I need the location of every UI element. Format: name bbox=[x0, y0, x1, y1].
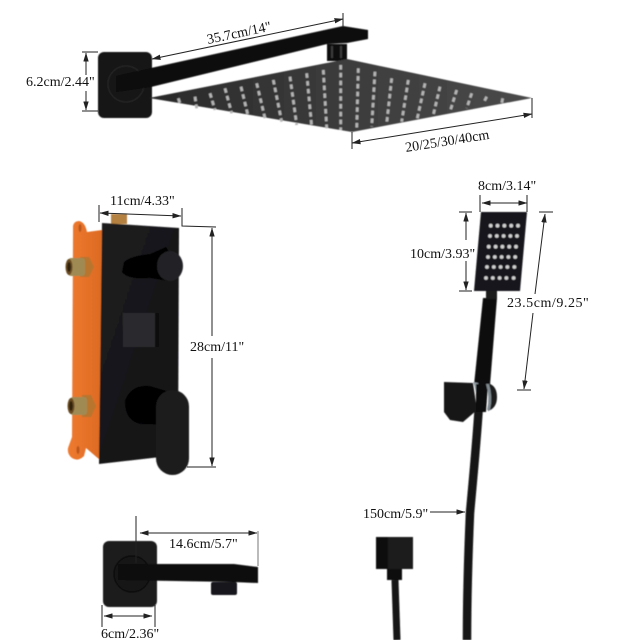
dimension: hand shower width: 8cm/3.14" bbox=[478, 179, 536, 194]
black faceplate bbox=[99, 223, 179, 464]
dimension: arm length bbox=[152, 13, 343, 59]
spout plate bbox=[103, 541, 157, 607]
dimension: valve width bbox=[99, 194, 216, 227]
dimension: hand shower length: 23.5cm/9.25" bbox=[507, 296, 589, 311]
spout ring bbox=[114, 556, 150, 592]
hand shower bbox=[444, 212, 527, 640]
dimension: valve width: 11cm/4.33" bbox=[110, 194, 175, 209]
bottom mounting ear hole bbox=[76, 446, 80, 454]
spray head bbox=[474, 212, 527, 291]
dimension: hose length bbox=[363, 507, 465, 522]
dimension: wall plate height bbox=[26, 52, 98, 111]
head nozzles bbox=[178, 65, 503, 130]
dimension: hand shower width bbox=[478, 179, 536, 212]
hose wall outlet bbox=[376, 537, 413, 640]
top mounting ear hole bbox=[78, 224, 82, 232]
brass top fitting bbox=[111, 214, 127, 224]
dimension: hand shower head height: 10cm/3.93" bbox=[410, 247, 475, 262]
square head bbox=[149, 59, 532, 132]
dimension: wall plate height: 6.2cm/2.44" bbox=[26, 75, 95, 90]
wall plate ring bbox=[108, 66, 144, 102]
upper knob bbox=[122, 247, 183, 281]
dimension: arm length: 35.7cm/14" bbox=[206, 20, 273, 48]
hose bbox=[467, 405, 479, 640]
orange box bbox=[68, 221, 102, 460]
arm connector bbox=[327, 44, 347, 61]
dimension: spout length: 14.6cm/5.7" bbox=[169, 537, 238, 552]
dimension: valve height: 28cm/11" bbox=[190, 340, 244, 355]
centre square bbox=[123, 313, 159, 347]
rain shower head assembly bbox=[98, 26, 532, 132]
tub spout bbox=[103, 541, 258, 607]
dimension: spout plate width bbox=[101, 605, 159, 640]
holder bracket bbox=[444, 382, 497, 422]
brass lower inlet bbox=[68, 395, 96, 417]
lever handle bbox=[125, 386, 189, 475]
handle bbox=[474, 298, 497, 385]
dimension: hand shower length bbox=[507, 212, 589, 390]
spout nut bbox=[211, 582, 237, 595]
concealed valve bbox=[66, 214, 189, 475]
dimension: head size bbox=[352, 98, 532, 156]
spout arm bbox=[118, 564, 258, 583]
dimension: spout length bbox=[136, 516, 258, 566]
spray nozzles bbox=[484, 224, 520, 280]
wall plate bbox=[98, 52, 152, 118]
dimension: hose length: 150cm/5.9" bbox=[363, 507, 428, 522]
shower arm bbox=[116, 26, 368, 92]
dimension: head size: 20/25/30/40cm bbox=[404, 128, 490, 156]
neck bbox=[486, 291, 497, 299]
dimension: hand shower head height bbox=[410, 212, 475, 291]
brass upper inlet bbox=[66, 257, 94, 277]
